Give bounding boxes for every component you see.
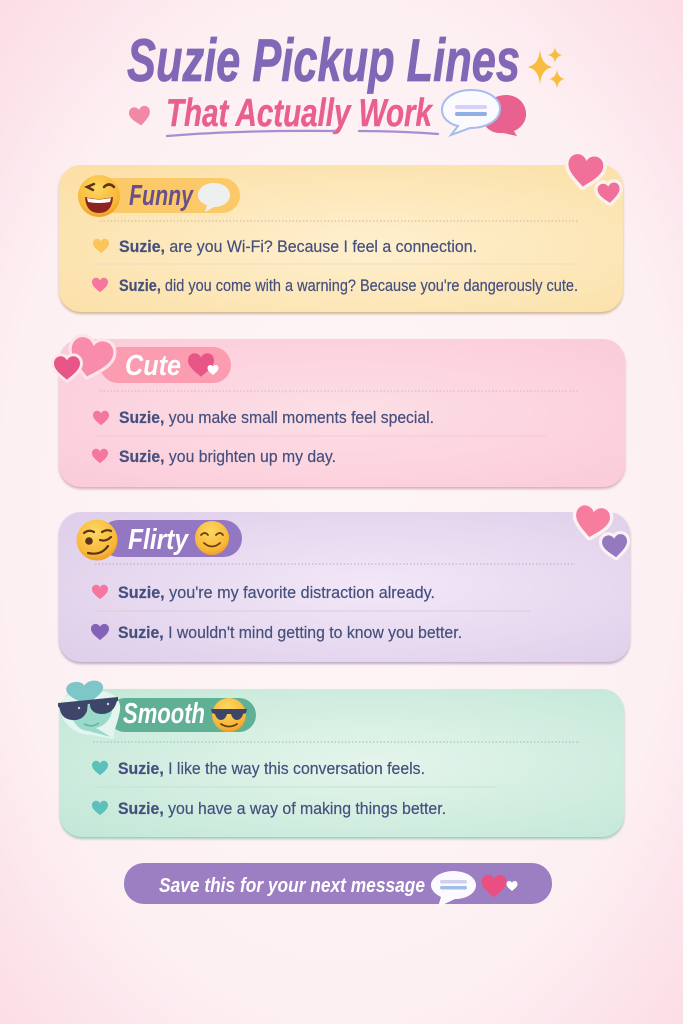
icon: smiling emoji	[195, 521, 229, 555]
category label: Funny	[129, 180, 194, 212]
category pill	[108, 698, 256, 732]
icon: laughing emoji	[78, 175, 120, 217]
icon: chat bubble	[431, 871, 476, 907]
icon: speech bubble	[198, 183, 230, 212]
icon: winking emoji	[76, 520, 118, 560]
category pill	[95, 178, 240, 213]
title block	[127, 27, 565, 136]
divider dotted	[95, 563, 575, 565]
line 1: Suzie, are you Wi-Fi? Because I feel a connection.	[119, 238, 477, 256]
title line 2: That Actually Work	[166, 92, 434, 135]
line 1: Suzie, you make small moments feel special.	[119, 409, 434, 427]
category label: Cute	[125, 350, 181, 382]
icon: chat bubbles	[442, 90, 526, 136]
divider dotted	[100, 220, 578, 222]
line 2: Suzie, you have a way of making things better.	[118, 800, 446, 818]
footer pill	[124, 863, 552, 904]
title line 1: Suzie Pickup Lines	[127, 27, 520, 94]
icon: hearts	[482, 875, 518, 897]
icon: pink heart left	[128, 105, 152, 127]
category label: Flirty	[128, 524, 190, 556]
card background	[59, 339, 625, 489]
icon: sunglasses emoji	[211, 698, 247, 732]
icon: sparkles	[527, 47, 565, 89]
line 1: Suzie, you're my favorite distraction already.	[118, 584, 435, 602]
line 1: Suzie, I like the way this conversation feels.	[118, 760, 425, 778]
card background	[59, 165, 623, 314]
category pill	[100, 520, 242, 557]
icon: big heart	[67, 335, 115, 381]
panel: cute	[54, 335, 625, 489]
corner hearts	[565, 153, 621, 204]
card background	[60, 689, 624, 839]
panel: flirty	[59, 504, 630, 664]
divider dotted	[100, 390, 578, 392]
line 2: Suzie, I wouldn't mind getting to know you better.	[118, 624, 462, 642]
divider dotted	[93, 741, 580, 743]
panel: funny	[59, 153, 623, 314]
icon: teal mascot with sunglasses	[58, 680, 120, 739]
panel: smooth	[58, 680, 624, 839]
category label: Smooth	[123, 698, 205, 730]
footer text: Save this for your next message	[159, 875, 425, 897]
icon: small heart	[54, 356, 80, 380]
category pill	[100, 347, 231, 383]
card background	[59, 512, 630, 664]
corner hearts	[573, 504, 629, 558]
footer call to action	[124, 863, 552, 907]
line 2: Suzie, you brighten up my day.	[119, 448, 336, 466]
line 2: Suzie, did you come with a warning? Because you're dangerously cute.	[119, 277, 578, 295]
title underline	[167, 131, 438, 136]
icon: pill hearts	[188, 353, 218, 377]
